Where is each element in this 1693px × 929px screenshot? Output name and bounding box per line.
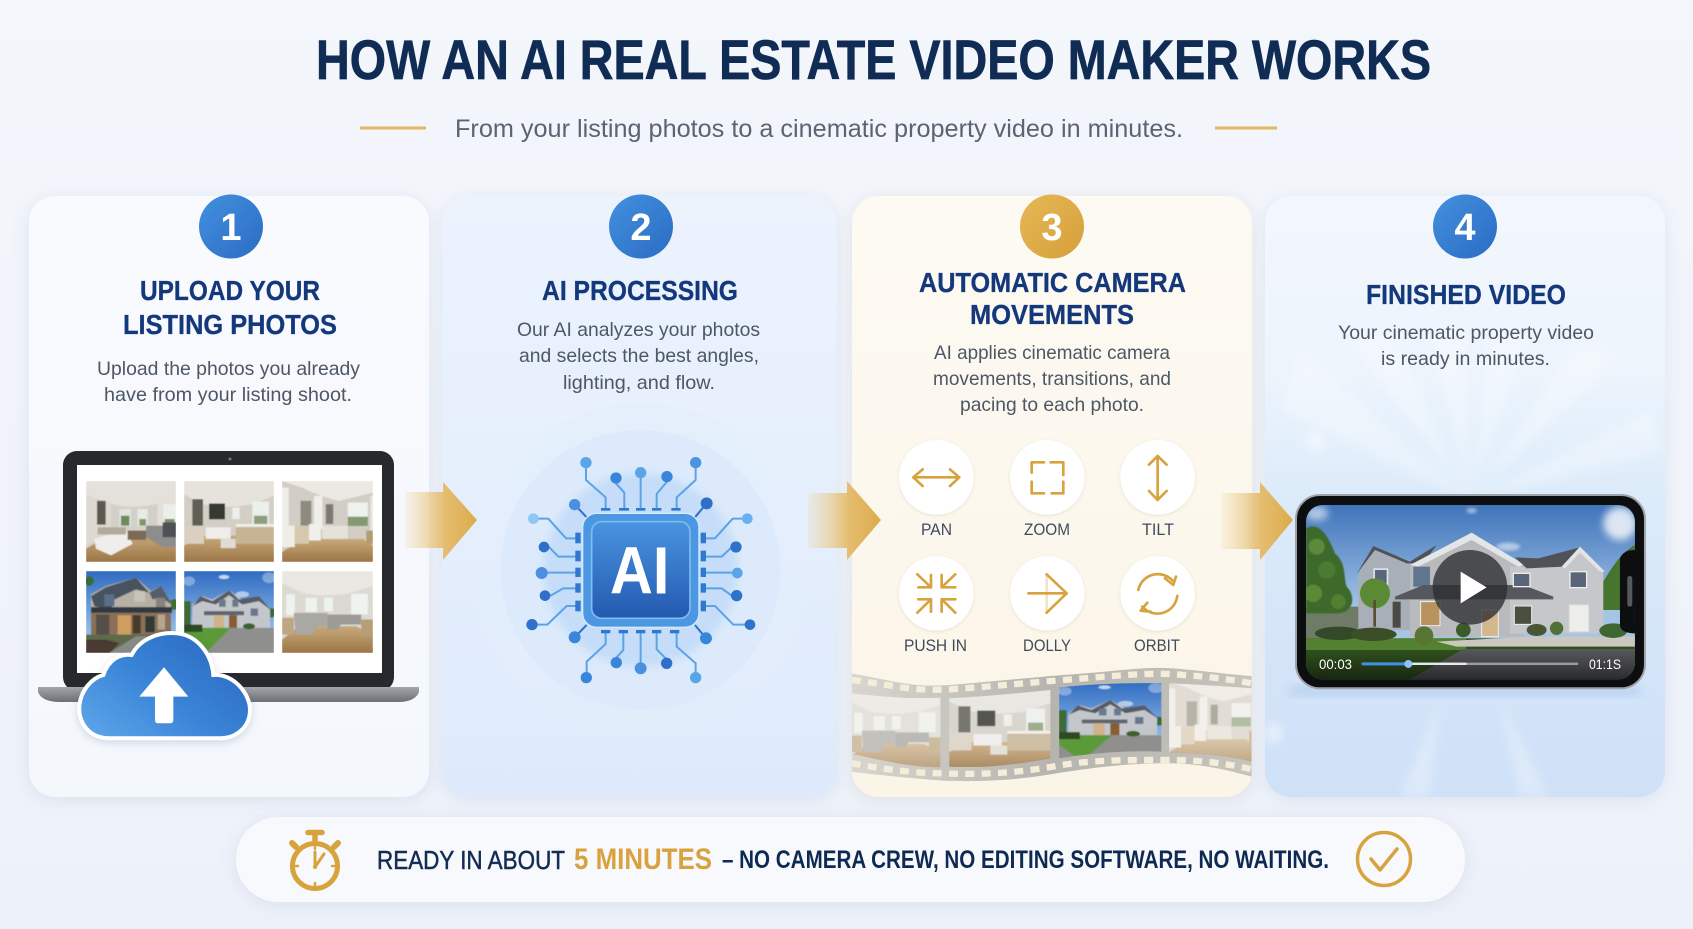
- step 3 badge: 3: [1041, 207, 1063, 249]
- movement labels: ZOOM: [1024, 521, 1070, 539]
- step 2 description: Our AI analyzes your photos: [517, 319, 760, 341]
- icon: AI chip with circuit traces: AI: [610, 534, 669, 608]
- step 1 description: Upload the photos you already: [97, 358, 360, 380]
- step 1 badge: 1: [220, 207, 242, 249]
- arrow: step 3 to 4: [1221, 482, 1293, 560]
- step 1 heading: UPLOAD YOUR: [140, 275, 320, 306]
- step 4 description: Your cinematic property video: [1338, 322, 1594, 344]
- laptop with photo grid: [38, 451, 419, 702]
- movement labels: PAN: [921, 521, 952, 539]
- panel 2 card: [442, 196, 837, 797]
- callout text: READY IN ABOUT: [377, 845, 565, 875]
- panel 4 card: [1265, 196, 1665, 797]
- step 2 badge: 2: [630, 207, 652, 249]
- icon: AI chip with circuit traces: [474, 403, 807, 737]
- step 3 heading: [919, 267, 1186, 330]
- callout text: 5 MINUTES: [574, 843, 712, 876]
- icon: check circle: [1358, 832, 1410, 886]
- step 4 badge: [1433, 194, 1497, 258]
- video timecodes: 00:03: [1319, 657, 1352, 672]
- phone playing the property video: [1296, 495, 1645, 688]
- step 3 description: pacing to each photo.: [960, 394, 1144, 416]
- callout text: – NO CAMERA CREW, NO EDITING SOFTWARE, NO WAITING.: [722, 846, 1329, 874]
- icon: pan: [899, 440, 974, 515]
- panel: step 3 camera movements: [850, 194, 1256, 797]
- panel: step 1 upload: [29, 194, 429, 797]
- icon: stopwatch: [292, 832, 338, 888]
- camera movement icons: [899, 440, 1195, 631]
- step 3 badge: [1020, 194, 1084, 258]
- step 2 description: [517, 319, 760, 394]
- step 3 description: AI applies cinematic camera: [934, 342, 1170, 364]
- step 1 description: have from your listing shoot.: [104, 384, 352, 406]
- icon: upload cloud: [79, 633, 250, 738]
- arrow: step 1 to 2: [405, 482, 477, 560]
- movement labels: DOLLY: [1023, 637, 1071, 655]
- icon: push in: [899, 556, 974, 631]
- step 4 description: [1338, 322, 1594, 370]
- step 1 description: [97, 358, 360, 406]
- step 3 heading: MOVEMENTS: [970, 299, 1134, 330]
- video timecodes: 01:1S: [1589, 657, 1621, 672]
- panel: step 2 AI processing: [442, 194, 837, 797]
- film strip: [850, 668, 1256, 781]
- step 1 badge: [199, 194, 263, 258]
- movement labels: PUSH IN: [904, 637, 967, 655]
- step 2 badge: [609, 194, 673, 258]
- step 3 description: movements, transitions, and: [933, 368, 1171, 390]
- callout text: [377, 843, 1329, 876]
- title: HOW AN AI REAL ESTATE VIDEO MAKER WORKS: [316, 28, 1431, 91]
- movement labels: [904, 521, 1180, 655]
- video timecodes: [1319, 657, 1621, 672]
- subtitle with gold rules: From your listing photos to a cinematic property video in minutes.: [455, 115, 1183, 143]
- step 1 heading: [123, 275, 337, 340]
- icon: zoom: [1010, 440, 1085, 515]
- bottom callout bar: [236, 817, 1465, 902]
- movement labels: TILT: [1142, 521, 1174, 539]
- arrow: step 2 to 3: [808, 481, 881, 560]
- movement labels: ORBIT: [1134, 637, 1180, 655]
- step 3 heading: AUTOMATIC CAMERA: [919, 267, 1186, 298]
- icon: dolly: [1010, 556, 1085, 631]
- panel 1 card: [29, 196, 429, 797]
- light rays and glints: [1266, 434, 1640, 796]
- panel 3 card: [852, 196, 1252, 797]
- step 2 description: and selects the best angles,: [519, 345, 759, 367]
- step 2 description: lighting, and flow.: [563, 372, 715, 394]
- step 1 heading: LISTING PHOTOS: [123, 309, 337, 340]
- step 3 description: [933, 342, 1171, 416]
- step 4 badge: 4: [1454, 207, 1476, 249]
- step 4 description: is ready in minutes.: [1381, 348, 1550, 370]
- step 4 heading: FINISHED VIDEO: [1366, 279, 1566, 310]
- icon: tilt: [1120, 440, 1195, 515]
- icon: orbit: [1120, 556, 1195, 631]
- step 2 heading: AI PROCESSING: [542, 275, 738, 306]
- callout pill: [236, 817, 1465, 902]
- panel: step 4 finished video: [1265, 194, 1665, 797]
